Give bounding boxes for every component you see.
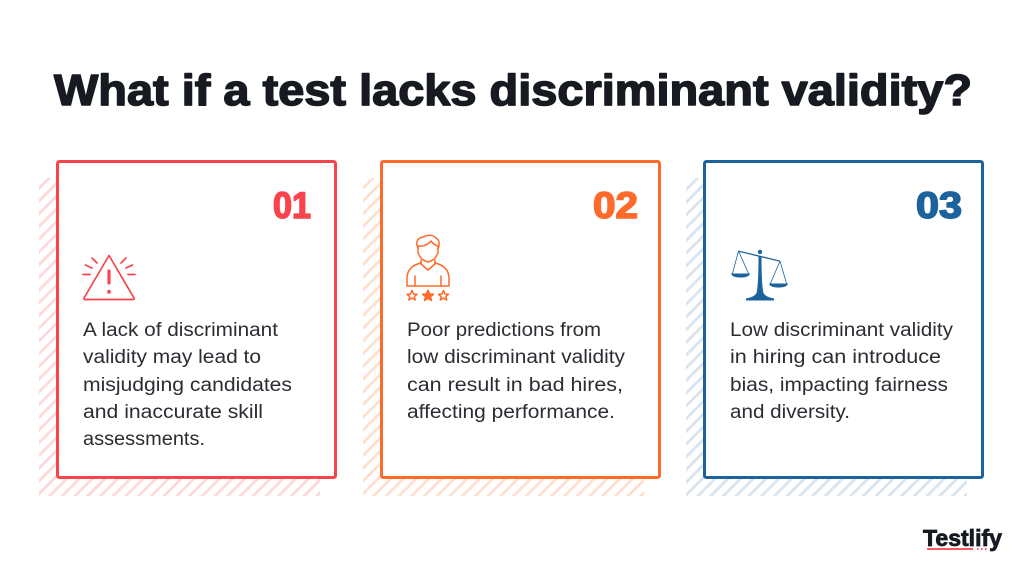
card 03 text: Low discriminant validity [730,320,954,341]
card 02 text: low discriminant validity [407,347,626,368]
card 03 text: bias, impacting fairness [730,375,948,396]
icon: person with stars [407,235,449,300]
card 02 text: affecting performance. [407,402,615,423]
card 01 text [83,320,292,450]
card 02 text: can result in bad hires, [407,375,623,396]
panel: card 01 [39,162,336,496]
card 03 text: and diversity. [730,402,850,423]
card 01 hatched shadow [39,178,320,496]
card 01 text: and inaccurate skill [83,402,263,423]
card 01 text: assessments. [83,429,205,450]
icon: warning triangle [83,256,135,300]
logo underline [927,548,986,550]
card 03 frame [704,162,982,478]
card 03 number: 03 [916,185,962,226]
card 02 text [407,320,626,423]
panel: card 02 [363,162,660,496]
card 02 frame [382,162,660,478]
card 02 number: 02 [593,185,638,226]
card 03 hatched shadow [686,178,967,496]
card 03 text: in hiring can introduce [730,347,941,368]
card 02 hatched shadow [363,178,644,496]
card 02 text: Poor predictions from [407,320,601,341]
panel: card 03 [686,162,982,496]
card 03 text [730,320,954,423]
card 01 text: A lack of discriminant [83,320,279,341]
icon: balance scale [731,250,788,300]
logo: Testlify: Testlify [923,525,1002,551]
card 01 frame [58,162,336,478]
card 01 text: misjudging candidates [83,375,292,396]
title: What if a test lacks discriminant validity? [54,66,972,115]
card 01 text: validity may lead to [83,347,261,368]
card 01 number: 01 [273,185,311,226]
